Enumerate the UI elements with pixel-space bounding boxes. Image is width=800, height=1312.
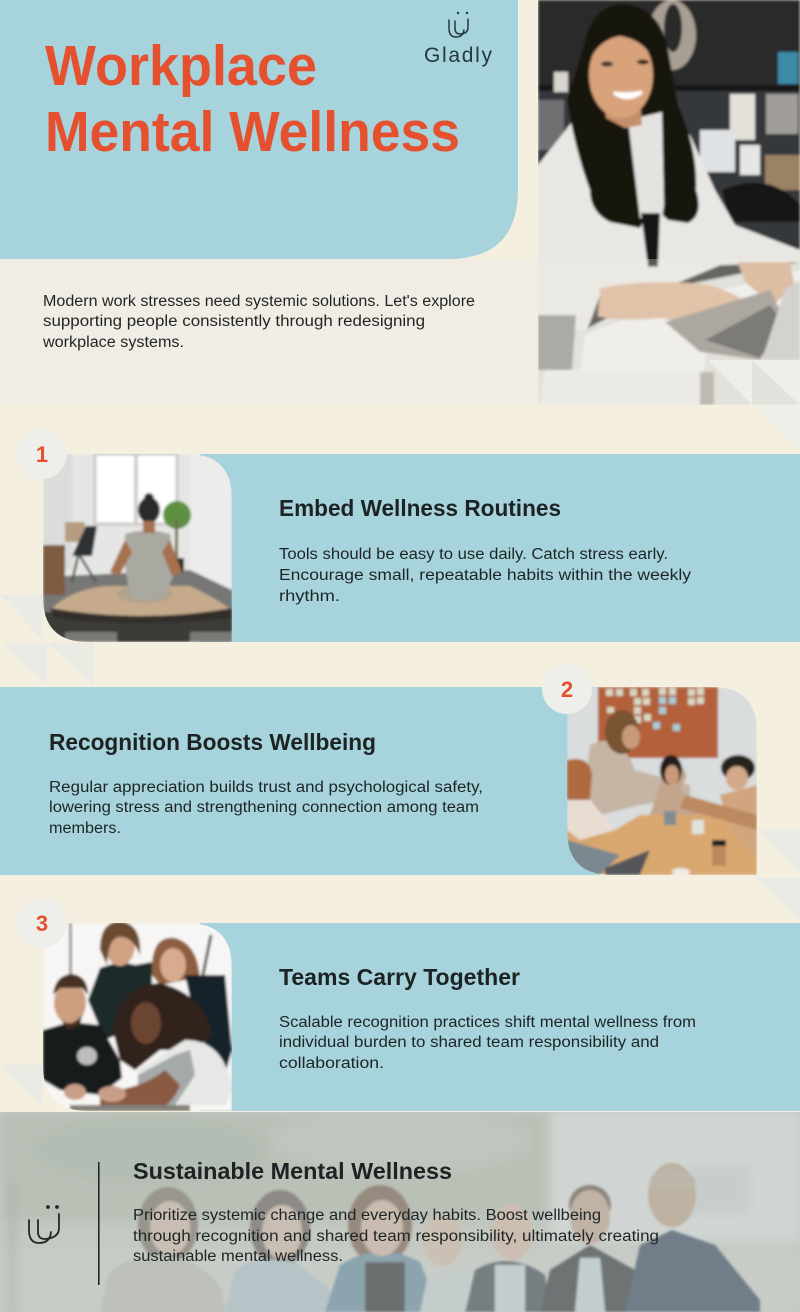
- photo: meditation: [43, 454, 232, 642]
- body text: Tools should be easy to use daily. Catch stress early.: [279, 546, 668, 563]
- header panel: [0, 0, 518, 259]
- body text: Prioritize systemic change and everyday habits. Boost wellbeing: [133, 1207, 601, 1224]
- panel: step 2: [0, 664, 757, 876]
- body text: individual burden to shared team responsibility and: [279, 1034, 659, 1051]
- body text: sustainable mental wellness.: [133, 1248, 343, 1265]
- panel: footer: [0, 1110, 800, 1312]
- footer photo: team walking: [0, 1110, 800, 1312]
- arm: [596, 281, 742, 322]
- intro text: Modern work stresses need systemic solutions. Let's explore: [43, 293, 475, 310]
- body text: [133, 1207, 659, 1265]
- number badge 3: 3: [36, 911, 48, 936]
- body text: Encourage small, repeatable habits within the weekly: [279, 567, 691, 584]
- number badge 3: [17, 898, 67, 948]
- decorative triangle top right: [755, 405, 800, 450]
- intro text: [42, 293, 475, 351]
- left triangle near step 3: [0, 1065, 43, 1108]
- hair: [567, 4, 699, 228]
- heading: Embed Wellness Routines: [279, 495, 561, 521]
- number badge 1: 1: [36, 442, 48, 467]
- body text: collaboration.: [279, 1055, 384, 1072]
- panel: step 1: [17, 429, 800, 642]
- photo: team at laptop: [43, 922, 232, 1111]
- neck: [603, 108, 644, 130]
- dark top: [641, 213, 660, 267]
- number badge 2: 2: [561, 677, 573, 702]
- icon: logo mark: [29, 1206, 59, 1243]
- right triangles: [757, 829, 800, 920]
- shirt centre: [628, 112, 664, 218]
- title: [45, 34, 460, 164]
- body text: [279, 1014, 696, 1072]
- left triangles: [0, 595, 94, 686]
- desk: [538, 262, 800, 405]
- logo: Gladly: [424, 12, 492, 67]
- body text: lowering stress and strengthening connection among team: [49, 799, 479, 816]
- logo: Gladly: Gladly: [424, 44, 492, 67]
- number badge 1: [17, 429, 67, 479]
- body text: members.: [49, 820, 121, 837]
- intro band: [0, 259, 538, 405]
- title: Mental Wellness: [45, 100, 460, 164]
- photo: team meeting: [567, 687, 757, 876]
- body text: rhythm.: [279, 588, 340, 605]
- shirt: [538, 118, 800, 335]
- intro text: supporting people consistently through redesigning: [43, 313, 425, 330]
- face: [589, 32, 653, 118]
- intro text: workplace systems.: [42, 334, 184, 351]
- panel: step 3: [17, 898, 800, 1111]
- heading: Sustainable Mental Wellness: [133, 1158, 452, 1184]
- heading: Teams Carry Together: [279, 964, 520, 990]
- laptop: [665, 290, 785, 360]
- body text: Regular appreciation builds trust and psychological safety,: [49, 779, 483, 796]
- photo corner triangles: [708, 360, 800, 405]
- body text: through recognition and shared team responsibility, ultimately creating: [133, 1228, 659, 1245]
- body text: Scalable recognition practices shift mental wellness from: [279, 1014, 696, 1031]
- vertical rule: [98, 1162, 100, 1285]
- body text: [49, 779, 483, 837]
- hero photo: woman at laptop: [538, 0, 800, 405]
- heading: Recognition Boosts Wellbeing: [49, 729, 376, 755]
- faded overlay on lower photo: [538, 259, 800, 405]
- number badge 2: [542, 664, 592, 714]
- body text: [279, 546, 691, 605]
- title: Workplace: [45, 34, 317, 98]
